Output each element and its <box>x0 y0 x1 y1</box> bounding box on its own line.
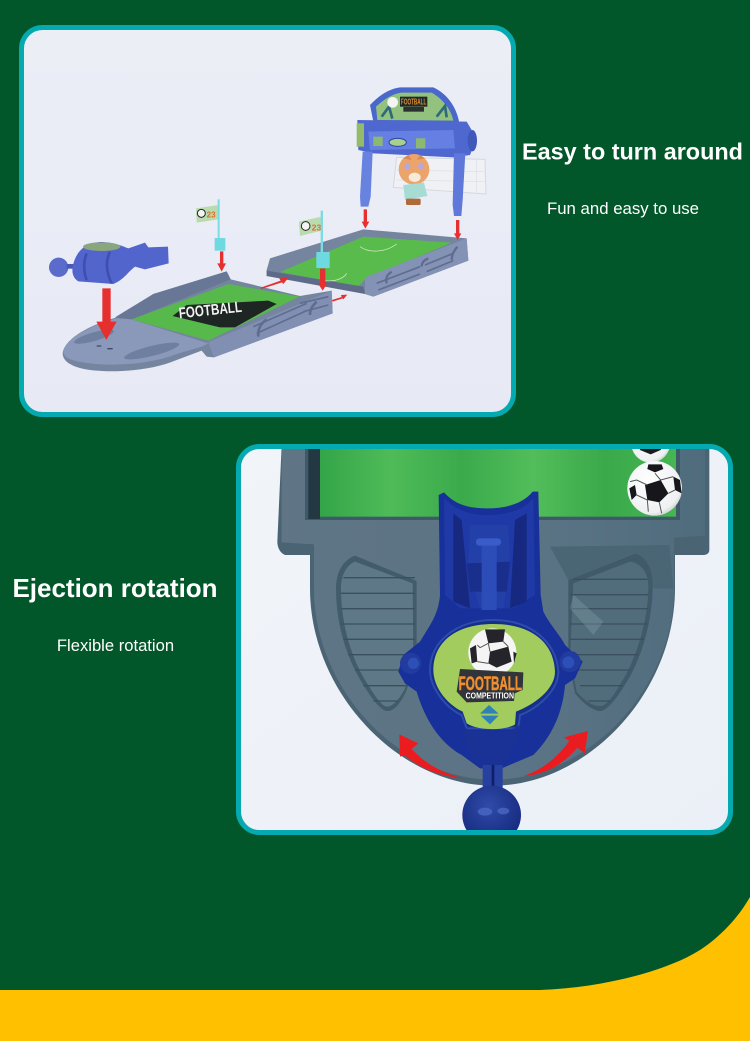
text: flexible rotation: Flexible rotation <box>57 636 174 655</box>
flags <box>196 199 330 268</box>
panel: exploded assembly photo <box>22 28 514 414</box>
right tray <box>267 229 468 297</box>
red rotation arrows <box>399 731 588 778</box>
football logo on left field <box>173 299 277 327</box>
blue handle and knob <box>462 726 521 830</box>
left louvre recess <box>336 556 417 711</box>
slate launcher board <box>277 445 709 786</box>
bear goalkeeper <box>399 154 429 205</box>
green badge with football logo: FOOTBALL <box>459 674 522 695</box>
panel: launcher close-up photo <box>238 424 730 844</box>
red assembly arrows <box>96 209 461 340</box>
heading: easy to turn around: Easy to turn around <box>522 138 743 164</box>
blue launcher chute <box>398 492 583 768</box>
heading: ejection rotation: Ejection rotation <box>12 573 218 603</box>
football logo on left field: FOOTBALL <box>178 299 243 322</box>
soccer balls <box>627 449 682 516</box>
flags: 23 <box>207 210 216 219</box>
green pitch <box>305 445 680 520</box>
flags: 23 <box>312 222 321 232</box>
green badge with football logo: COMPETITION <box>466 690 514 700</box>
right louvre recess <box>568 553 653 711</box>
goal frame: FOOTBALL <box>401 97 426 106</box>
left tray with launcher base <box>63 271 333 371</box>
text: fun and easy to use: Fun and easy to use <box>547 199 699 218</box>
goal net <box>393 157 486 194</box>
launcher part <box>49 242 169 284</box>
goal frame <box>357 87 477 216</box>
yellow footer wave <box>0 897 750 1041</box>
green badge with football logo <box>430 620 558 729</box>
